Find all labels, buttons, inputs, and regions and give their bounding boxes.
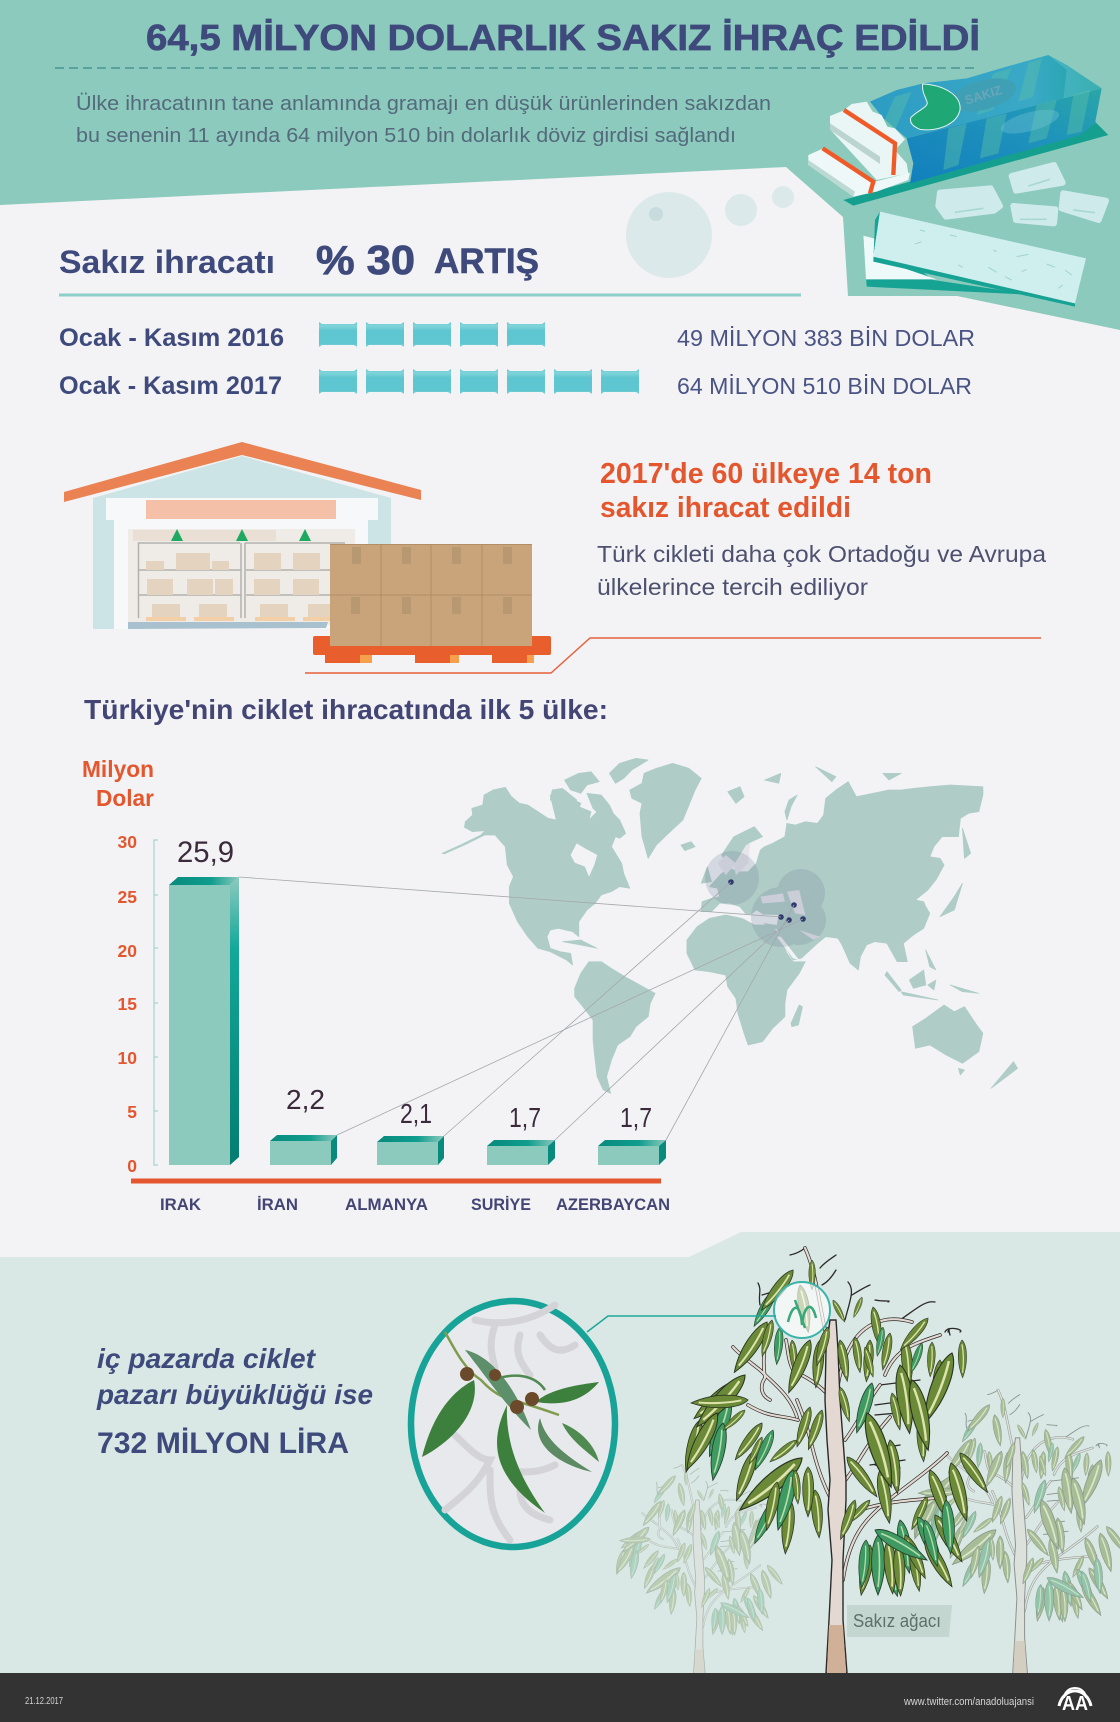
cardboard boxes (330, 544, 532, 646)
decorative callout line (305, 638, 1041, 673)
heading: top 5 countries: Türkiye'nin ciklet ihracatında ilk 5 ülke: (84, 694, 608, 725)
branch and green leaves (445, 1332, 559, 1415)
text block: export volume: Türk cikleti daha çok Ortadoğu ve Avrupa (597, 541, 1047, 567)
x axis: İRAN (257, 1196, 298, 1214)
y axis: 10 (118, 1048, 137, 1068)
y axis: 0 (127, 1156, 137, 1176)
world map (442, 758, 1018, 1093)
label: gum tree (847, 1605, 952, 1637)
icon row: 5 gums (319, 322, 545, 347)
axis title: Dolar (96, 785, 154, 811)
grey background leaves (445, 1305, 575, 1540)
bar: Almanya: 2,1 (400, 1098, 432, 1129)
magnified leaves circle (411, 1301, 615, 1547)
comparison row: 2016: Ocak - Kasım 2016 (59, 324, 284, 352)
bar: Suriye: 1,7 (509, 1102, 541, 1133)
y axis: 30 (118, 832, 137, 852)
intro text (76, 92, 771, 147)
gum brand label: SAKIZ (963, 83, 1004, 108)
background tree: left (614, 1465, 785, 1673)
label: gum tree: Sakız ağacı (853, 1611, 941, 1631)
y axis: 20 (118, 941, 137, 961)
footer bar (0, 1673, 1120, 1722)
heading: gum export increase: Sakız ihracatı (59, 244, 275, 280)
icon: warehouse with pallet (64, 442, 551, 663)
header teal band (0, 0, 1120, 330)
icon: AA logo: AA (1062, 1693, 1088, 1715)
y axis (118, 832, 158, 1176)
footer bar: www.twitter.com/anadoluajansi (903, 1696, 1034, 1708)
heading: gum export increase: % 30 (316, 237, 415, 283)
bar: İran (270, 1084, 337, 1165)
background tree: right (911, 1390, 1120, 1673)
comparison row: 2016 (59, 322, 975, 352)
comparison row: 2017: 64 MİLYON 510 BİN DOLAR (677, 373, 972, 399)
icon: chewing gum bubbles (626, 186, 794, 278)
text block: domestic market: iç pazarda ciklet (97, 1343, 317, 1374)
gum pieces (938, 165, 1106, 223)
axis title (82, 756, 154, 811)
text block: export volume: ülkelerince tercih ediliyor (597, 574, 868, 600)
text block: domestic market: pazarı büyüklüğü ise (96, 1379, 373, 1410)
x axis: ALMANYA (345, 1196, 428, 1214)
bar: İran: 2,2 (286, 1084, 325, 1115)
pallet (313, 636, 551, 663)
bar: Suriye (487, 1102, 555, 1165)
x axis: AZERBAYCAN (556, 1196, 670, 1214)
heading: gum export increase (59, 237, 539, 283)
bottom panel background (0, 1232, 1120, 1673)
heading: gum export increase: ARTIŞ (434, 242, 539, 281)
comparison row: 2016: 49 MİLYON 383 BİN DOLAR (677, 325, 975, 351)
footer bar: 21.12.2017 (25, 1695, 63, 1707)
title: 64,5 MİLYON DOLARLIK SAKIZ İHRAÇ EDİLDİ (146, 17, 980, 58)
intro text: Ülke ihracatının tane anlamında gramajı en düşük ürünlerinden sakızdan (76, 92, 771, 115)
text block: domestic market: 732 MİLYON LİRA (97, 1427, 349, 1460)
text block: export volume (597, 458, 1047, 600)
y axis: 25 (118, 887, 137, 907)
main gum tree (680, 1248, 992, 1673)
y axis: 15 (118, 994, 137, 1014)
bar: Azerbaycan (598, 1102, 666, 1165)
connector lines from bars to countries (239, 877, 803, 1140)
bar: Almanya (377, 1098, 444, 1165)
x axis (131, 1178, 670, 1214)
text block: export volume: sakız ihracat edildi (600, 492, 851, 524)
icon: gum pack and sticks (808, 55, 1108, 307)
intro text: bu senenin 11 ayında 64 milyon 510 bin dolarlık döviz girdisi sağlandı (76, 124, 736, 147)
bar: Irak (169, 836, 239, 1165)
x axis: SURİYE (471, 1196, 531, 1214)
text block: domestic market (96, 1343, 373, 1460)
comparison row: 2017: Ocak - Kasım 2017 (59, 372, 282, 400)
y axis: 5 (127, 1102, 137, 1122)
comparison row: 2017 (59, 369, 972, 400)
axis title: Milyon (82, 756, 154, 782)
connector to magnified leaves (587, 1316, 776, 1332)
x axis: IRAK (160, 1196, 201, 1214)
icon: mint leaf (910, 84, 960, 130)
text block: export volume: 2017'de 60 ülkeye 14 ton (600, 458, 932, 490)
bar: Irak: 25,9 (177, 836, 234, 869)
tree highlight circle (774, 1282, 830, 1338)
map highlight circles and dots (705, 851, 826, 947)
bar: Azerbaycan: 1,7 (620, 1102, 652, 1133)
icon row: 7 gums (319, 369, 639, 394)
